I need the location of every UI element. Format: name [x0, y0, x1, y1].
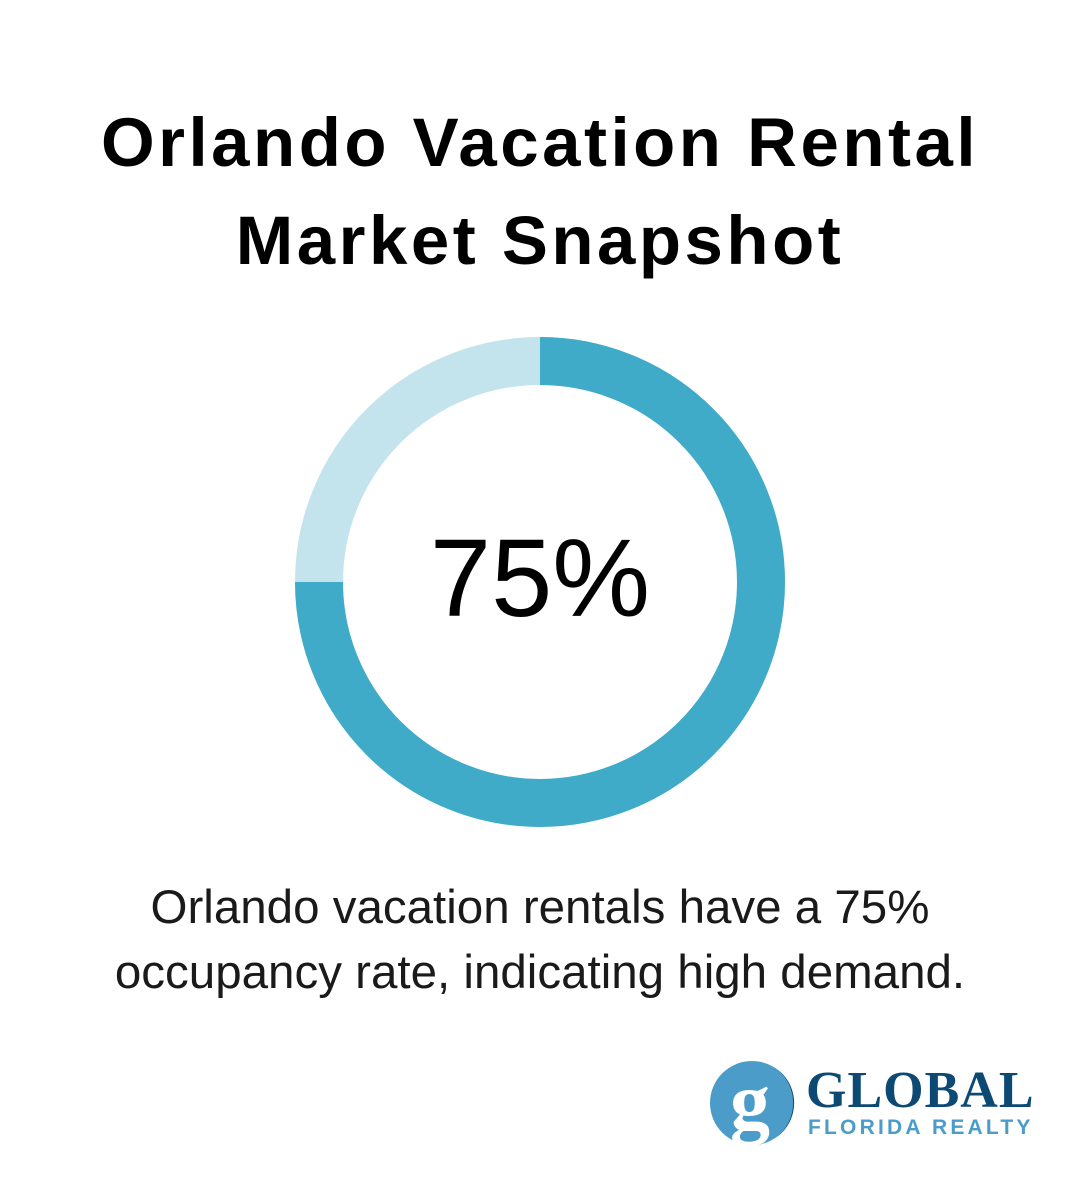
donut background ring — [319, 361, 761, 803]
description text: occupancy rate, indicating high demand. — [115, 946, 965, 999]
title — [101, 104, 979, 279]
logo text: GLOBAL — [806, 1062, 1034, 1119]
description text: Orlando vacation rentals have a 75% — [151, 881, 929, 934]
logo: FLORIDA REALTY — [808, 1116, 1034, 1139]
logo — [710, 1060, 1034, 1146]
title: Orlando Vacation Rental — [101, 104, 979, 181]
logo icon: g — [730, 1060, 770, 1146]
title: Market Snapshot — [236, 202, 844, 279]
donut 75% arc — [319, 361, 761, 803]
description text — [115, 881, 965, 999]
logo icon — [710, 1060, 794, 1146]
percentage label: 75% — [430, 517, 650, 640]
